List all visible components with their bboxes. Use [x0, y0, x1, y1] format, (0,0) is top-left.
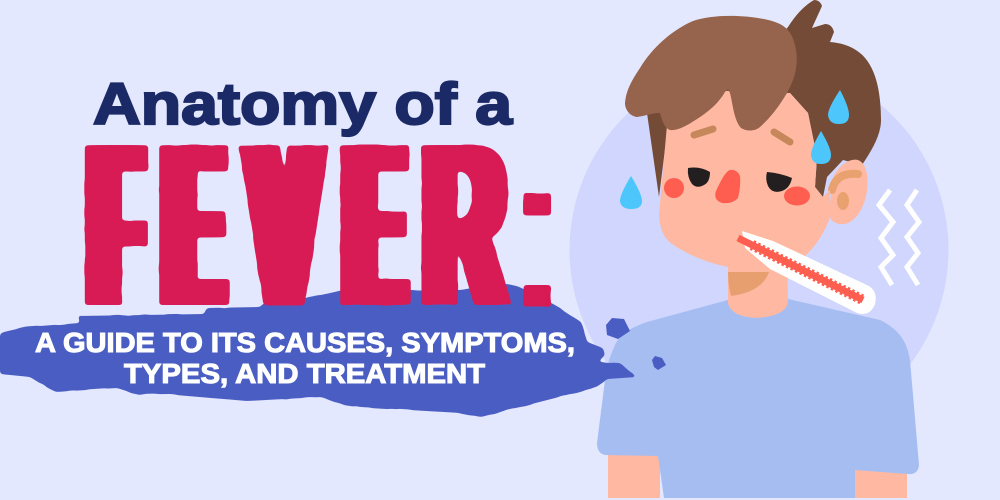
background circle	[570, 60, 948, 440]
thermometer	[738, 231, 876, 314]
inner ear	[832, 174, 858, 190]
blue paint splash	[0, 284, 666, 417]
eyes	[688, 168, 792, 192]
sweat drops	[620, 90, 849, 209]
heading: FEVER: E	[154, 96, 206, 355]
back hair	[647, 0, 881, 197]
character	[597, 0, 919, 498]
face	[659, 90, 831, 270]
paint chip small	[652, 356, 666, 370]
thermometer glass	[742, 231, 876, 314]
heading: Anatomy of a: Anatomy of a	[93, 72, 513, 137]
mercury ticks	[752, 245, 863, 300]
ear hollow	[837, 192, 849, 210]
ear lobe	[830, 160, 867, 224]
neck shadow	[728, 272, 769, 296]
heading: FEVER: R	[414, 96, 494, 355]
eyebrows	[694, 129, 790, 142]
front hair	[625, 16, 797, 131]
subtitle line 2: TYPES, AND TREATMENT	[124, 358, 485, 389]
nose	[715, 170, 740, 203]
heading: FEVER: :	[503, 112, 564, 353]
splash body	[0, 284, 637, 417]
heading: FEVER: F	[80, 96, 124, 355]
neck	[728, 255, 788, 318]
heading: FEVER: E	[335, 96, 387, 355]
cheeks	[664, 178, 810, 206]
paint chip large	[606, 318, 630, 339]
subtitle line 1: A GUIDE TO ITS CAUSES, SYMPTOMS,	[35, 327, 575, 358]
ear	[830, 160, 867, 224]
arms	[608, 450, 907, 498]
t-shirt	[597, 299, 919, 498]
heading: FEVER: V	[238, 96, 303, 355]
shiver lines	[879, 190, 919, 285]
mercury	[738, 238, 863, 300]
